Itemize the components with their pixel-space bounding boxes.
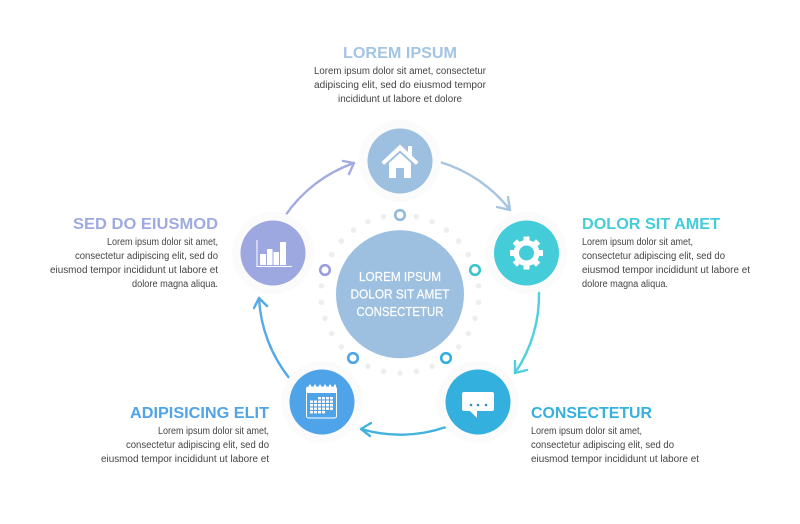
arrow: bottom left to left bbox=[254, 298, 290, 379]
text block: left step bbox=[50, 216, 218, 290]
text block: left step: eiusmod tempor incididunt ut labore et bbox=[50, 265, 218, 276]
icon: chat bubble bbox=[462, 392, 494, 418]
arrow: left to top bbox=[285, 161, 354, 216]
text block: bottom right step bbox=[531, 405, 699, 465]
central circle: DOLOR SIT AMET bbox=[350, 288, 450, 302]
text block: left step: SED DO EIUSMOD bbox=[73, 216, 218, 233]
text block: right step: eiusmod tempor incididunt ut labore et bbox=[582, 265, 750, 276]
text block: left step: consectetur adipiscing elit, sed do bbox=[75, 251, 218, 262]
text block: top step: adipiscing elit, sed do eiusmod tempor bbox=[314, 80, 487, 91]
text block: bottom left step: Lorem ipsum dolor sit amet, bbox=[158, 426, 269, 437]
icon: house bbox=[382, 144, 418, 178]
text block: left step: dolore magna aliqua. bbox=[132, 279, 218, 290]
text block: bottom right step: CONSECTETUR bbox=[531, 405, 652, 422]
text block: left step: Lorem ipsum dolor sit amet, bbox=[107, 237, 218, 248]
text block: bottom right step: eiusmod tempor incididunt ut labore et bbox=[531, 454, 699, 465]
text block: bottom left step: consectetur adipiscing elit, sed do bbox=[126, 440, 269, 451]
arrow: bottom right to bottom left bbox=[361, 423, 446, 436]
text block: top step: LOREM IPSUM bbox=[343, 45, 457, 62]
arrow: right to bottom right bbox=[515, 291, 539, 373]
central circle bbox=[336, 230, 464, 358]
text block: right step bbox=[582, 216, 750, 290]
text block: bottom left step: ADIPISICING ELIT bbox=[130, 405, 269, 422]
ring marker: right bbox=[470, 265, 480, 275]
step node: right, gear icon bbox=[486, 212, 568, 294]
icon: gear bbox=[510, 236, 543, 270]
step node: left, bar chart icon bbox=[232, 212, 314, 294]
icon: calendar bbox=[306, 384, 336, 418]
text block: right step: dolore magna aliqua. bbox=[582, 279, 668, 290]
text block: right step: Lorem ipsum dolor sit amet, bbox=[582, 237, 693, 248]
text block: right step: consectetur adipiscing elit, sed do bbox=[582, 251, 725, 262]
text block: top step: Lorem ipsum dolor sit amet, consectetur bbox=[314, 66, 487, 77]
ring marker: left bbox=[320, 265, 330, 275]
ring marker: bottom right bbox=[441, 353, 451, 363]
central circle: LOREM IPSUM bbox=[359, 270, 441, 284]
step node: top, home icon bbox=[359, 120, 441, 202]
text block: bottom right step: Lorem ipsum dolor sit amet, bbox=[531, 426, 642, 437]
step node: bottom left, calendar icon bbox=[281, 361, 363, 443]
ring marker: top bbox=[395, 210, 405, 220]
dotted ring bbox=[319, 214, 481, 376]
arrow: top to right bbox=[440, 162, 510, 210]
text block: right step: DOLOR SIT AMET bbox=[582, 216, 720, 233]
text block: bottom left step bbox=[101, 405, 269, 465]
text block: bottom left step: eiusmod tempor incididunt ut labore et bbox=[101, 454, 269, 465]
step node: bottom right, chat icon bbox=[437, 361, 519, 443]
text block: top step: incididunt ut labore et dolore bbox=[338, 94, 462, 105]
ring marker: bottom left bbox=[348, 353, 358, 363]
icon: bar chart bbox=[256, 240, 292, 267]
central circle: CONSECTETUR bbox=[356, 305, 444, 319]
text block: top step bbox=[314, 45, 487, 105]
text block: bottom right step: consectetur adipiscing elit, sed do bbox=[531, 440, 674, 451]
